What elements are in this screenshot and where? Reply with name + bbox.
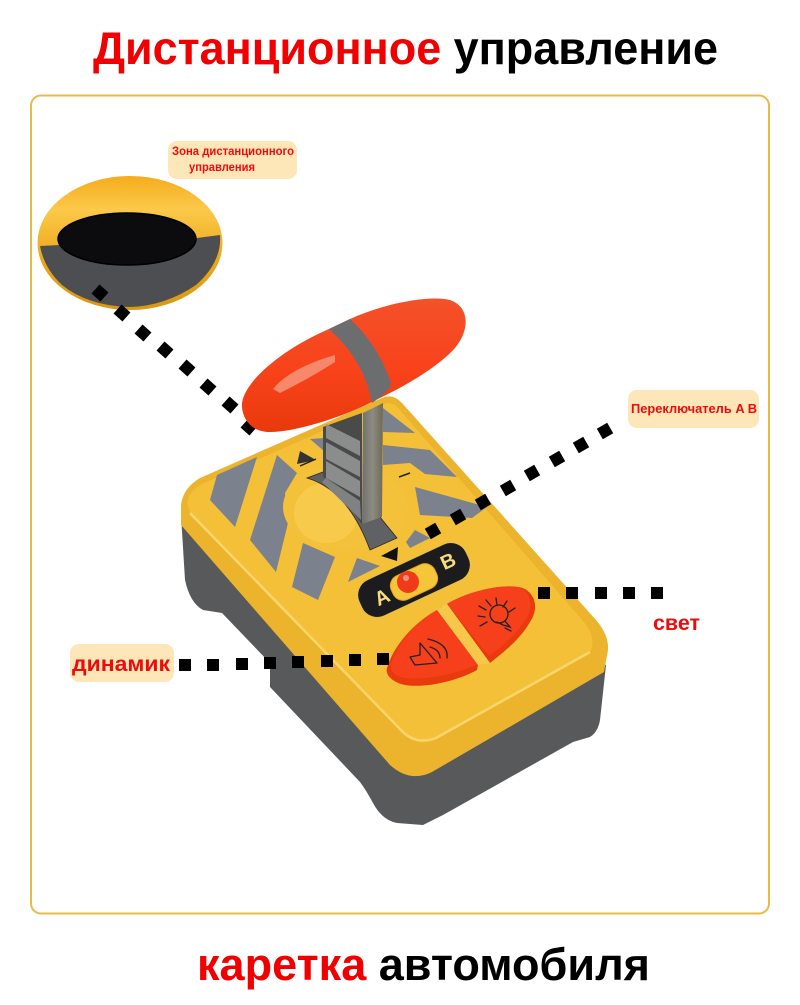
dotted leader: light [538, 587, 663, 599]
letter B: B [437, 549, 460, 575]
label: remote control zone [168, 141, 297, 179]
label: remote control zone: управления [189, 160, 255, 174]
device grey base [181, 515, 606, 825]
dotted leader: A B switch [425, 423, 613, 539]
handle: red body [242, 299, 466, 432]
inset: remote control zone [38, 176, 222, 310]
inset dark body [40, 235, 220, 307]
product: remote control device [181, 299, 608, 825]
device top face [187, 403, 592, 741]
panel frame [31, 96, 769, 914]
lever: sweep base [307, 472, 397, 550]
title: Дистанционное управление [93, 22, 718, 74]
label: A B switch: Переключатель A B [631, 402, 757, 416]
label: A B switch [628, 390, 759, 428]
icon: speaker [410, 639, 447, 665]
lever: ladder [322, 413, 362, 523]
button: speaker [387, 610, 478, 686]
label: speaker [70, 644, 174, 682]
label: speaker: динамик [72, 652, 170, 676]
divider strip between buttons [437, 604, 490, 665]
handle: highlight [273, 355, 335, 393]
handle: grey band [329, 319, 391, 403]
bottom caption: каретка автомобиля [197, 939, 650, 990]
arrows and marks near dial [297, 451, 410, 561]
inset sensor window [58, 213, 196, 265]
switch red knob [397, 571, 419, 593]
chevron markings [210, 408, 487, 600]
label: remote control zone: Зона дистанционного [172, 144, 294, 158]
dotted leader: remote zone [92, 285, 257, 435]
inset circle [38, 176, 222, 310]
icon: light bulb [478, 598, 515, 631]
dotted leader: speaker [179, 653, 389, 671]
A-B switch panel [352, 537, 476, 623]
letter A: A [371, 585, 394, 611]
label: light: свет [653, 612, 700, 635]
dial lens [294, 483, 358, 543]
device yellow shell [181, 396, 608, 776]
dial ring [283, 464, 407, 550]
lever: column [362, 403, 383, 524]
button: light [447, 586, 535, 663]
face rim highlight [190, 513, 590, 741]
switch slot [387, 560, 441, 604]
